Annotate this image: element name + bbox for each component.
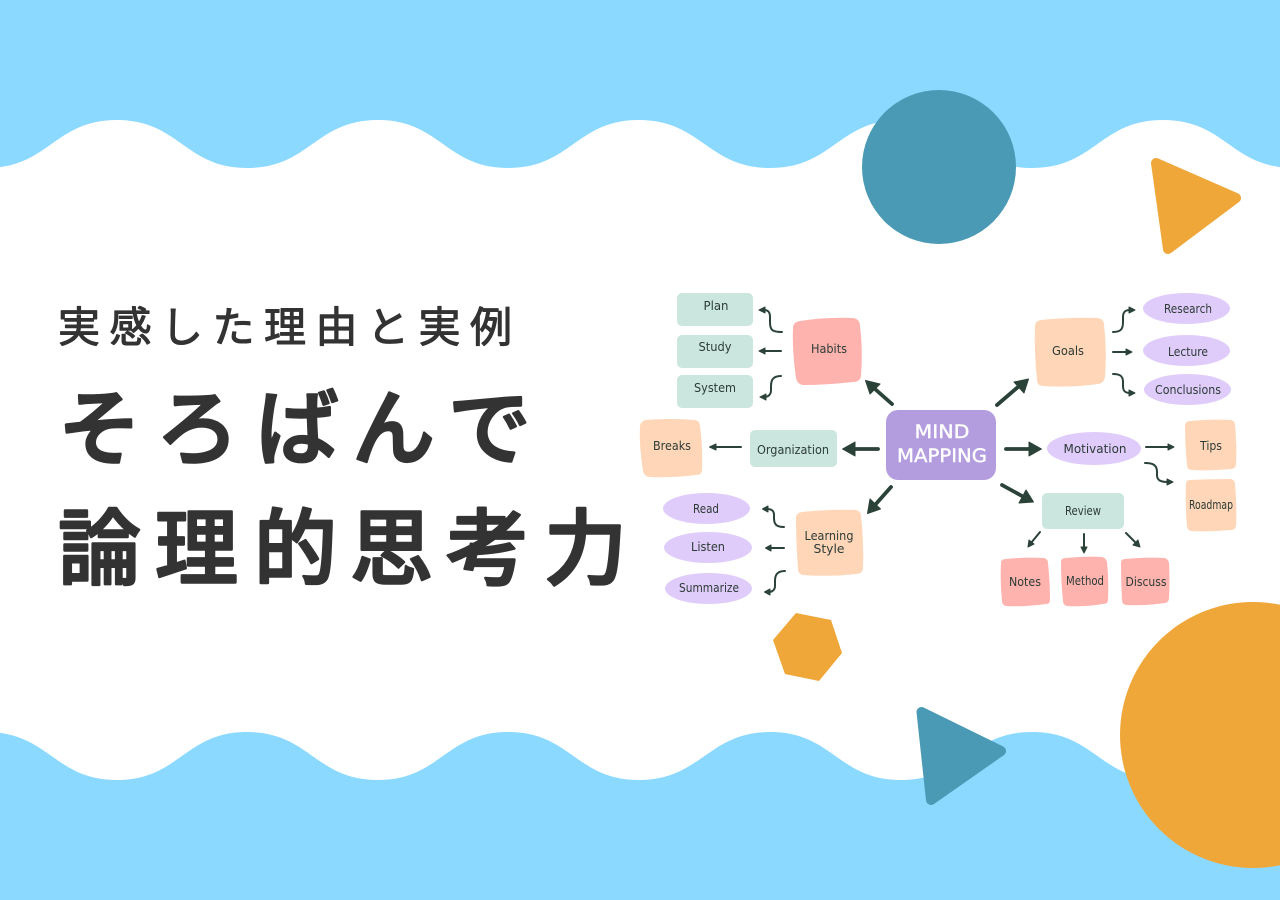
arrow: Goals to Conclusions: [1113, 374, 1135, 396]
node: Roadmap: [1186, 479, 1236, 531]
node: Organization: [750, 430, 837, 467]
node: Discuss: Discuss: [1126, 575, 1166, 589]
arrow: Motivation to Roadmap: [1145, 463, 1173, 485]
node: Review: [1042, 493, 1124, 529]
node: Learning Style: Style: [814, 542, 844, 556]
arrow: Review to Notes: [1028, 532, 1040, 547]
node: Research: [1143, 293, 1230, 324]
title line 2: 論理的思考力: [58, 503, 627, 596]
node: Goals: [1035, 318, 1106, 387]
node: Organization: Organization: [757, 443, 829, 457]
orange triangle: [1156, 163, 1236, 249]
arrow: centre to Habits: [866, 380, 892, 404]
title line 1: そろばんで: [58, 383, 531, 476]
node: Read: [663, 493, 750, 524]
node: Notes: [1001, 558, 1050, 606]
subtitle: 実感した理由と実例: [58, 304, 512, 351]
node: Tips: [1185, 420, 1236, 470]
node: Conclusions: Conclusions: [1155, 383, 1221, 397]
arrow: centre to Learning Style: [868, 487, 891, 514]
node: System: [677, 375, 753, 408]
central node: MAPPING: [897, 445, 987, 467]
teal circle: [862, 90, 1016, 244]
mind map: [640, 293, 1236, 606]
arrow: Goals to Lecture: [1113, 349, 1132, 355]
node: Learning Style: [796, 510, 863, 576]
top wave band: [0, 0, 1280, 168]
node: Summarize: Summarize: [679, 581, 739, 595]
node: Study: [677, 335, 753, 368]
arrow: Habits to Plan: [759, 307, 782, 332]
orange hexagon: [773, 613, 842, 681]
node: Lecture: [1143, 335, 1230, 366]
node: Discuss: [1121, 558, 1170, 605]
node: Tips: Tips: [1199, 439, 1222, 453]
arrow: Learning Style to Read: [762, 506, 784, 527]
arrow: Learning Style to Listen: [766, 545, 784, 551]
node: Notes: Notes: [1009, 575, 1041, 589]
node: Learning Style: Learning: [804, 529, 854, 543]
orange circle: [1120, 602, 1280, 868]
arrow: Habits to System: [760, 376, 781, 400]
arrow: centre to Review: [1002, 485, 1034, 503]
node: Method: Method: [1066, 574, 1104, 588]
node: Review: Review: [1065, 504, 1101, 518]
node: Motivation: [1047, 432, 1141, 465]
node: Listen: Listen: [691, 540, 725, 554]
arrow: Organization to Breaks: [710, 444, 741, 450]
node: Conclusions: [1144, 374, 1231, 405]
node: Study: Study: [698, 340, 732, 354]
arrow: centre to Organization: [842, 442, 878, 456]
node: Lecture: Lecture: [1168, 345, 1208, 359]
node: Research: Research: [1164, 302, 1212, 316]
arrow: Learning Style to Summarize: [764, 571, 785, 595]
central node: [886, 410, 996, 480]
node: Summarize: [665, 573, 752, 604]
node: Method: [1061, 557, 1108, 606]
teal triangle: [922, 712, 1001, 800]
node: Roadmap: Roadmap: [1189, 498, 1233, 512]
node: Plan: Plan: [704, 299, 728, 313]
node: Listen: [664, 532, 752, 563]
node: Habits: Habits: [811, 342, 847, 356]
arrow: Habits to Study: [759, 348, 781, 354]
node: Breaks: [640, 419, 702, 477]
arrow: Goals to Research: [1113, 307, 1135, 332]
arrow: Motivation to Tips: [1146, 444, 1174, 450]
node: System: System: [694, 381, 736, 395]
bottom wave band: [0, 732, 1280, 900]
central node: MIND: [914, 421, 970, 443]
node: Breaks: Breaks: [653, 439, 691, 453]
arrow: centre to Motivation: [1006, 442, 1042, 456]
node: Habits: [793, 318, 862, 385]
arrow: Review to Method: [1081, 534, 1087, 553]
node: Plan: [677, 293, 753, 326]
arrow: Review to Discuss: [1126, 533, 1140, 547]
node: Goals: Goals: [1052, 344, 1084, 358]
node: Motivation: Motivation: [1064, 442, 1126, 456]
node: Read: Read: [693, 502, 719, 516]
arrow: centre to Goals: [997, 379, 1028, 405]
